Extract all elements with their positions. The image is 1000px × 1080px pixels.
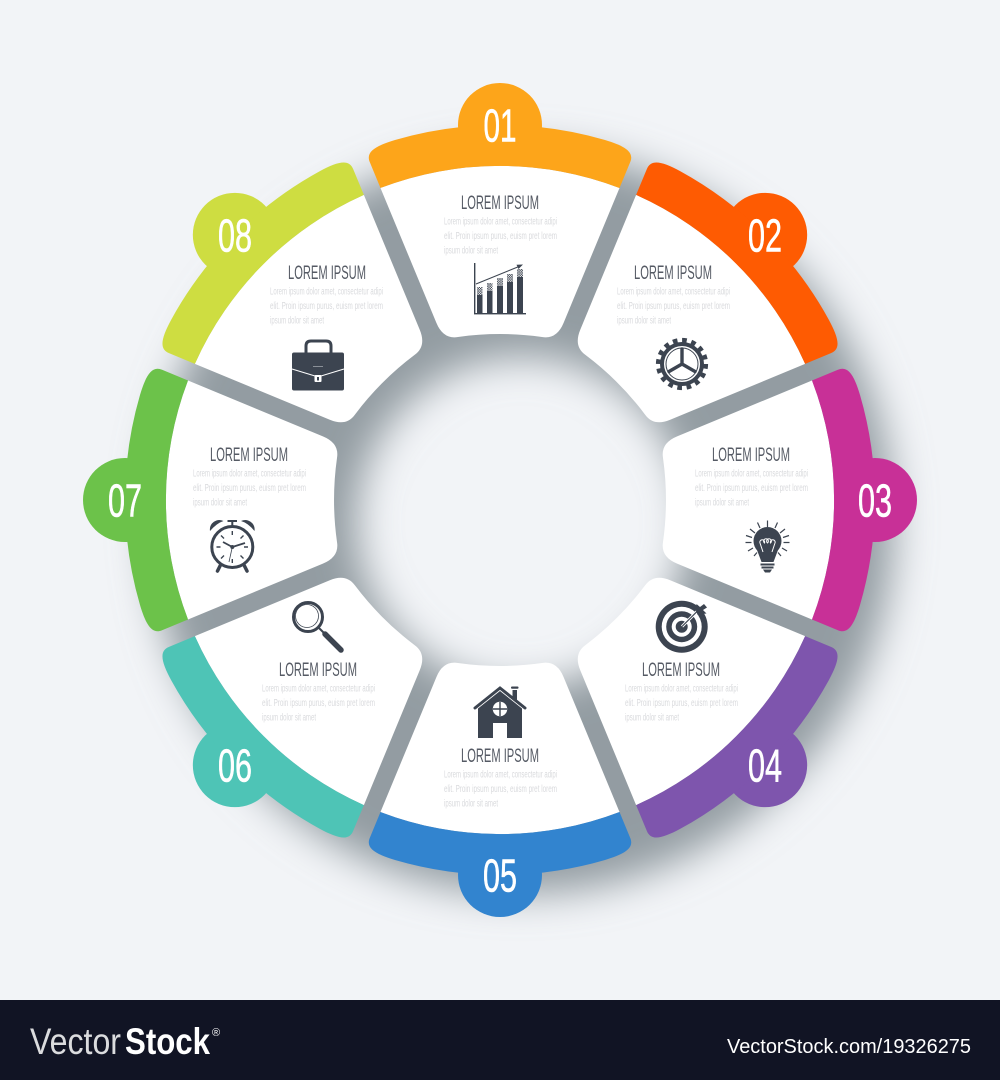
text block 05 xyxy=(444,746,557,810)
number 02: 02 xyxy=(748,210,782,262)
text block 08: LOREM IPSUM xyxy=(288,263,366,284)
text block 06 xyxy=(262,660,375,724)
watermark logo xyxy=(30,1021,220,1062)
number 07: 07 xyxy=(108,474,142,526)
icon: light bulb xyxy=(746,520,790,572)
icon: briefcase xyxy=(292,341,344,390)
panel: segment 05 xyxy=(369,663,631,917)
icon: bar chart xyxy=(474,263,526,314)
panel: segment 03 xyxy=(663,369,917,631)
icon: alarm clock xyxy=(210,520,255,571)
text block 05: LOREM IPSUM xyxy=(461,746,539,767)
text block 02: LOREM IPSUM xyxy=(634,263,712,284)
panel: segment 08 xyxy=(112,112,478,478)
text block 04: ipsum dolor sit amet xyxy=(625,712,679,724)
text block 03: LOREM IPSUM xyxy=(712,445,790,466)
text block 08: Lorem ipsum dolor amet, consectetur adipi xyxy=(270,286,383,298)
watermark url: VectorStock.com/19326275 xyxy=(727,1036,971,1058)
number 05: 05 xyxy=(483,850,517,902)
text block 01 xyxy=(444,193,557,256)
text block 02: Lorem ipsum dolor amet, consectetur adipi xyxy=(617,286,730,298)
number 03: 03 xyxy=(858,474,892,526)
text block 07: Lorem ipsum dolor amet, consectetur adipi xyxy=(193,468,306,480)
number 08: 08 xyxy=(218,210,252,262)
text block 06: Lorem ipsum dolor amet, consectetur adipi xyxy=(262,684,375,694)
panel: segment 06 xyxy=(112,522,478,888)
icon: target xyxy=(656,601,708,653)
text block 03: ipsum dolor sit amet xyxy=(695,498,749,508)
text block 03: Lorem ipsum dolor amet, consectetur adipi xyxy=(695,468,808,480)
number 06: 06 xyxy=(218,740,252,792)
text block 02: ipsum dolor sit amet xyxy=(617,316,671,326)
number 04: 04 xyxy=(748,740,782,792)
watermark logo: Vector xyxy=(30,1021,121,1062)
ring shadow xyxy=(150,150,894,894)
text block 04 xyxy=(625,660,738,724)
text block 06: ipsum dolor sit amet xyxy=(262,712,316,724)
text block 05: elit. Proin ipsum purus, euism pret lorem xyxy=(444,784,557,795)
watermark logo: Stock xyxy=(125,1021,210,1062)
number 01: 01 xyxy=(484,100,516,152)
text block 02 xyxy=(617,263,730,326)
text block 02: elit. Proin ipsum purus, euism pret lorem xyxy=(617,301,730,312)
text block 03: elit. Proin ipsum purus, euism pret lorem xyxy=(695,483,808,494)
text block 07: LOREM IPSUM xyxy=(210,445,288,466)
text block 04: LOREM IPSUM xyxy=(642,660,720,681)
icon: gear xyxy=(658,340,706,388)
text block 01: elit. Proin ipsum purus, euism pret lorem xyxy=(444,231,557,242)
text block 07: ipsum dolor sit amet xyxy=(193,498,247,508)
panel: segment 04 xyxy=(522,522,888,888)
text block 01: ipsum dolor sit amet xyxy=(444,246,498,256)
panel: segment 01 xyxy=(369,83,631,337)
icon: magnifier xyxy=(294,602,341,650)
text block 01: LOREM IPSUM xyxy=(461,193,539,214)
footer bar xyxy=(0,1000,1000,1080)
watermark logo: ® xyxy=(212,1027,220,1039)
text block 07: elit. Proin ipsum purus, euism pret lorem xyxy=(193,483,306,494)
text block 08: elit. Proin ipsum purus, euism pret lorem xyxy=(270,301,383,312)
icon: house xyxy=(475,686,525,738)
panel: segment 02 xyxy=(522,112,888,478)
text block 07 xyxy=(193,445,306,508)
text block 05: ipsum dolor sit amet xyxy=(444,798,498,810)
text block 08 xyxy=(270,263,383,326)
text block 06: elit. Proin ipsum purus, euism pret lorem xyxy=(262,698,375,709)
text block 04: elit. Proin ipsum purus, euism pret lorem xyxy=(625,698,738,709)
text block 03 xyxy=(695,445,808,508)
text block 06: LOREM IPSUM xyxy=(279,660,357,681)
text block 08: ipsum dolor sit amet xyxy=(270,316,324,326)
panel: segment 07 xyxy=(83,369,337,631)
text block 01: Lorem ipsum dolor amet, consectetur adipi xyxy=(444,216,557,228)
text block 04: Lorem ipsum dolor amet, consectetur adipi xyxy=(625,684,738,694)
text block 05: Lorem ipsum dolor amet, consectetur adipi xyxy=(444,770,557,780)
